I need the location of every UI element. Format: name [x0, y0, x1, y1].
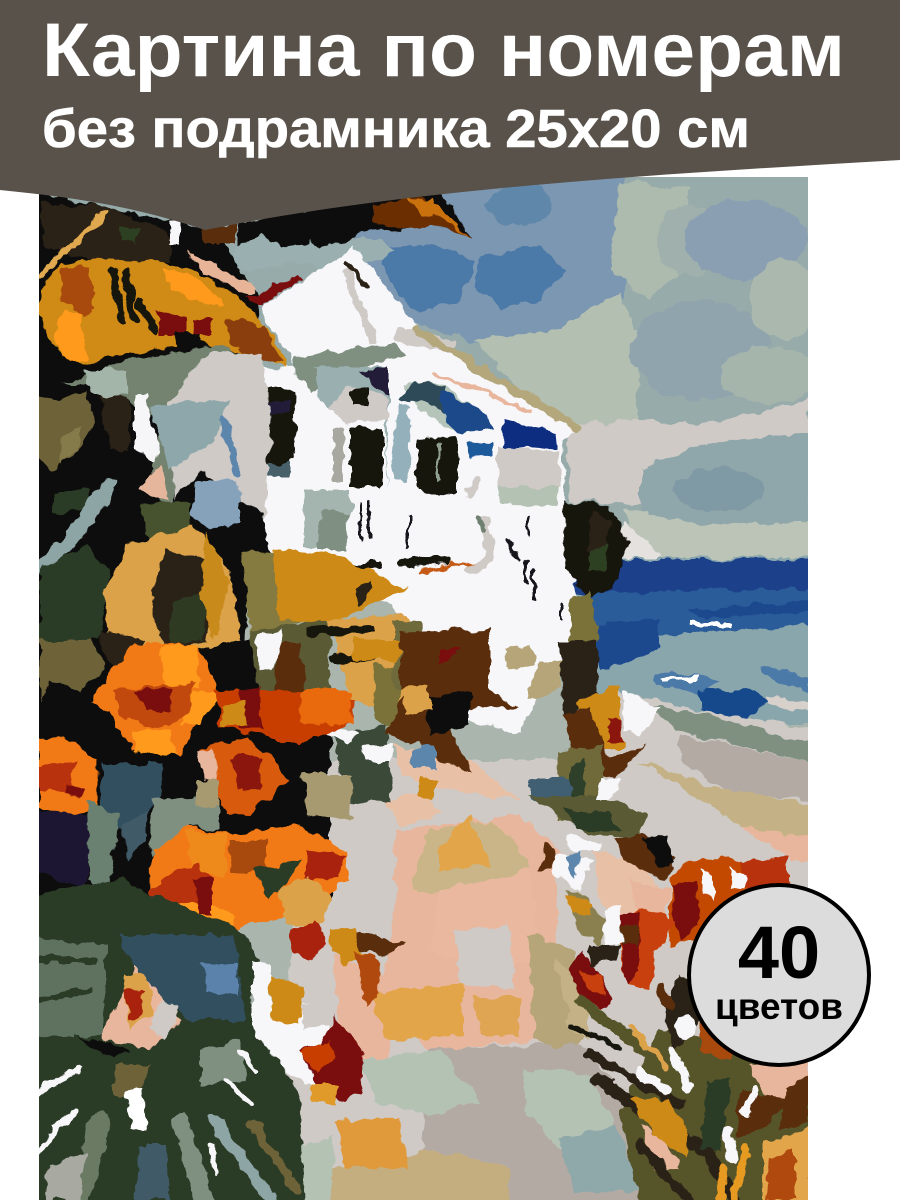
badge: 40 colours: цветов: [715, 986, 843, 1027]
lower left foliage: [30, 880, 364, 1200]
title: Картина по номерам: [42, 8, 845, 93]
sea: [570, 558, 820, 723]
left foliage: dark trees and top palm: [30, 190, 408, 900]
left flowers: [30, 642, 406, 1005]
badge: 40 colours: 40: [738, 911, 820, 994]
painting: beach house with flowers: [30, 170, 820, 1200]
subtitle: без подрамника 25х20 см: [42, 99, 750, 159]
sky: [30, 170, 820, 570]
mid plants: [250, 615, 535, 820]
badge: 40 colours: [689, 885, 869, 1065]
right flowers: [565, 855, 790, 1008]
top palm fronds: [236, 190, 470, 250]
ground path: [280, 745, 820, 1200]
house: [240, 247, 578, 735]
header banner: [0, 0, 900, 230]
bottom right plant: [572, 975, 820, 1200]
beach: [600, 690, 820, 890]
plant beside house: [525, 500, 677, 915]
